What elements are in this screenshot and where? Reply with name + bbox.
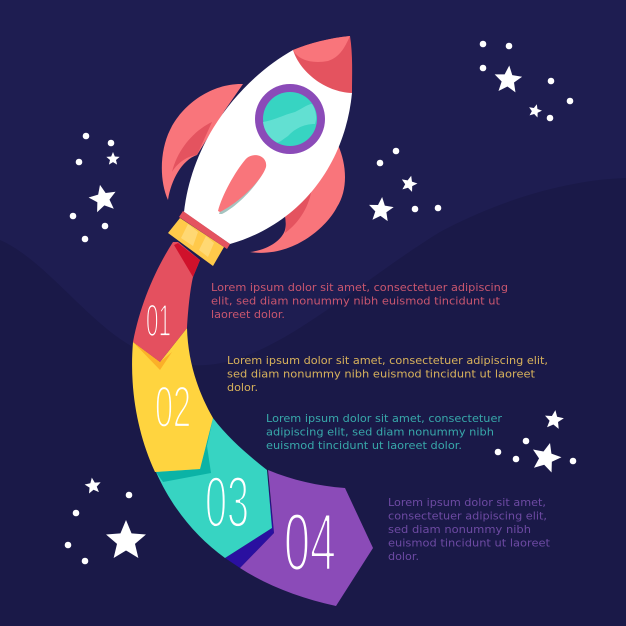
text block 03 [266, 412, 503, 452]
segment 01 [133, 242, 200, 362]
nose cone [293, 36, 352, 93]
porthole [255, 84, 325, 154]
stars and dots: lower left [65, 476, 146, 564]
stars and dots: top right [480, 41, 573, 121]
text block 03: adipiscing elit, sed diam nonummy nibh [266, 426, 494, 438]
text block 02: Lorem ipsum dolor sit amet, consectetuer adipiscing elit, [227, 354, 548, 367]
text block 04: euismod tincidunt ut laoreet [388, 536, 550, 550]
rocket [162, 36, 352, 266]
segment 04 [225, 470, 373, 606]
segment 02 [132, 328, 213, 472]
text block 01: elit, sed diam nonummy nibh euismod tincidunt ut [211, 294, 500, 308]
text block 03: euismod tincidunt ut laoreet dolor. [266, 439, 462, 452]
text block 01 [211, 281, 508, 321]
text block 04: dolor. [388, 550, 419, 563]
text block 04 [388, 496, 550, 563]
text block 01: laoreet dolor. [211, 308, 285, 321]
number 04: 04 [284, 497, 336, 588]
text block 04: sed diam nonummy nibh [388, 523, 531, 536]
text block 01: Lorem ipsum dolor sit amet, consectetuer adipiscing [211, 281, 508, 294]
text block 02: sed diam nonummy nibh euismod tincidunt ut laoreet [227, 368, 535, 380]
segment 01: 01 [146, 295, 171, 346]
flame trail [132, 242, 373, 606]
number 02: 02 [155, 375, 191, 440]
exhaust collar [168, 211, 230, 266]
right fin [250, 145, 345, 253]
text block 02 [227, 354, 548, 394]
rocket body [184, 50, 352, 244]
text block 03: Lorem ipsum dolor sit amet, consectetuer [266, 412, 503, 425]
rocket window [218, 155, 266, 214]
text block 04: Lorem ipsum dolor sit amet, [388, 496, 546, 509]
text block 02: dolor. [227, 381, 258, 394]
text block 04: consectetuer adipiscing elit, [388, 510, 547, 522]
number 03: 03 [205, 463, 249, 543]
stars and dots: upper middle [368, 148, 441, 222]
stars and dots: upper left [70, 133, 120, 242]
stars and dots: lower right [495, 409, 576, 474]
segment 03 [156, 418, 272, 558]
left fin [162, 84, 243, 200]
